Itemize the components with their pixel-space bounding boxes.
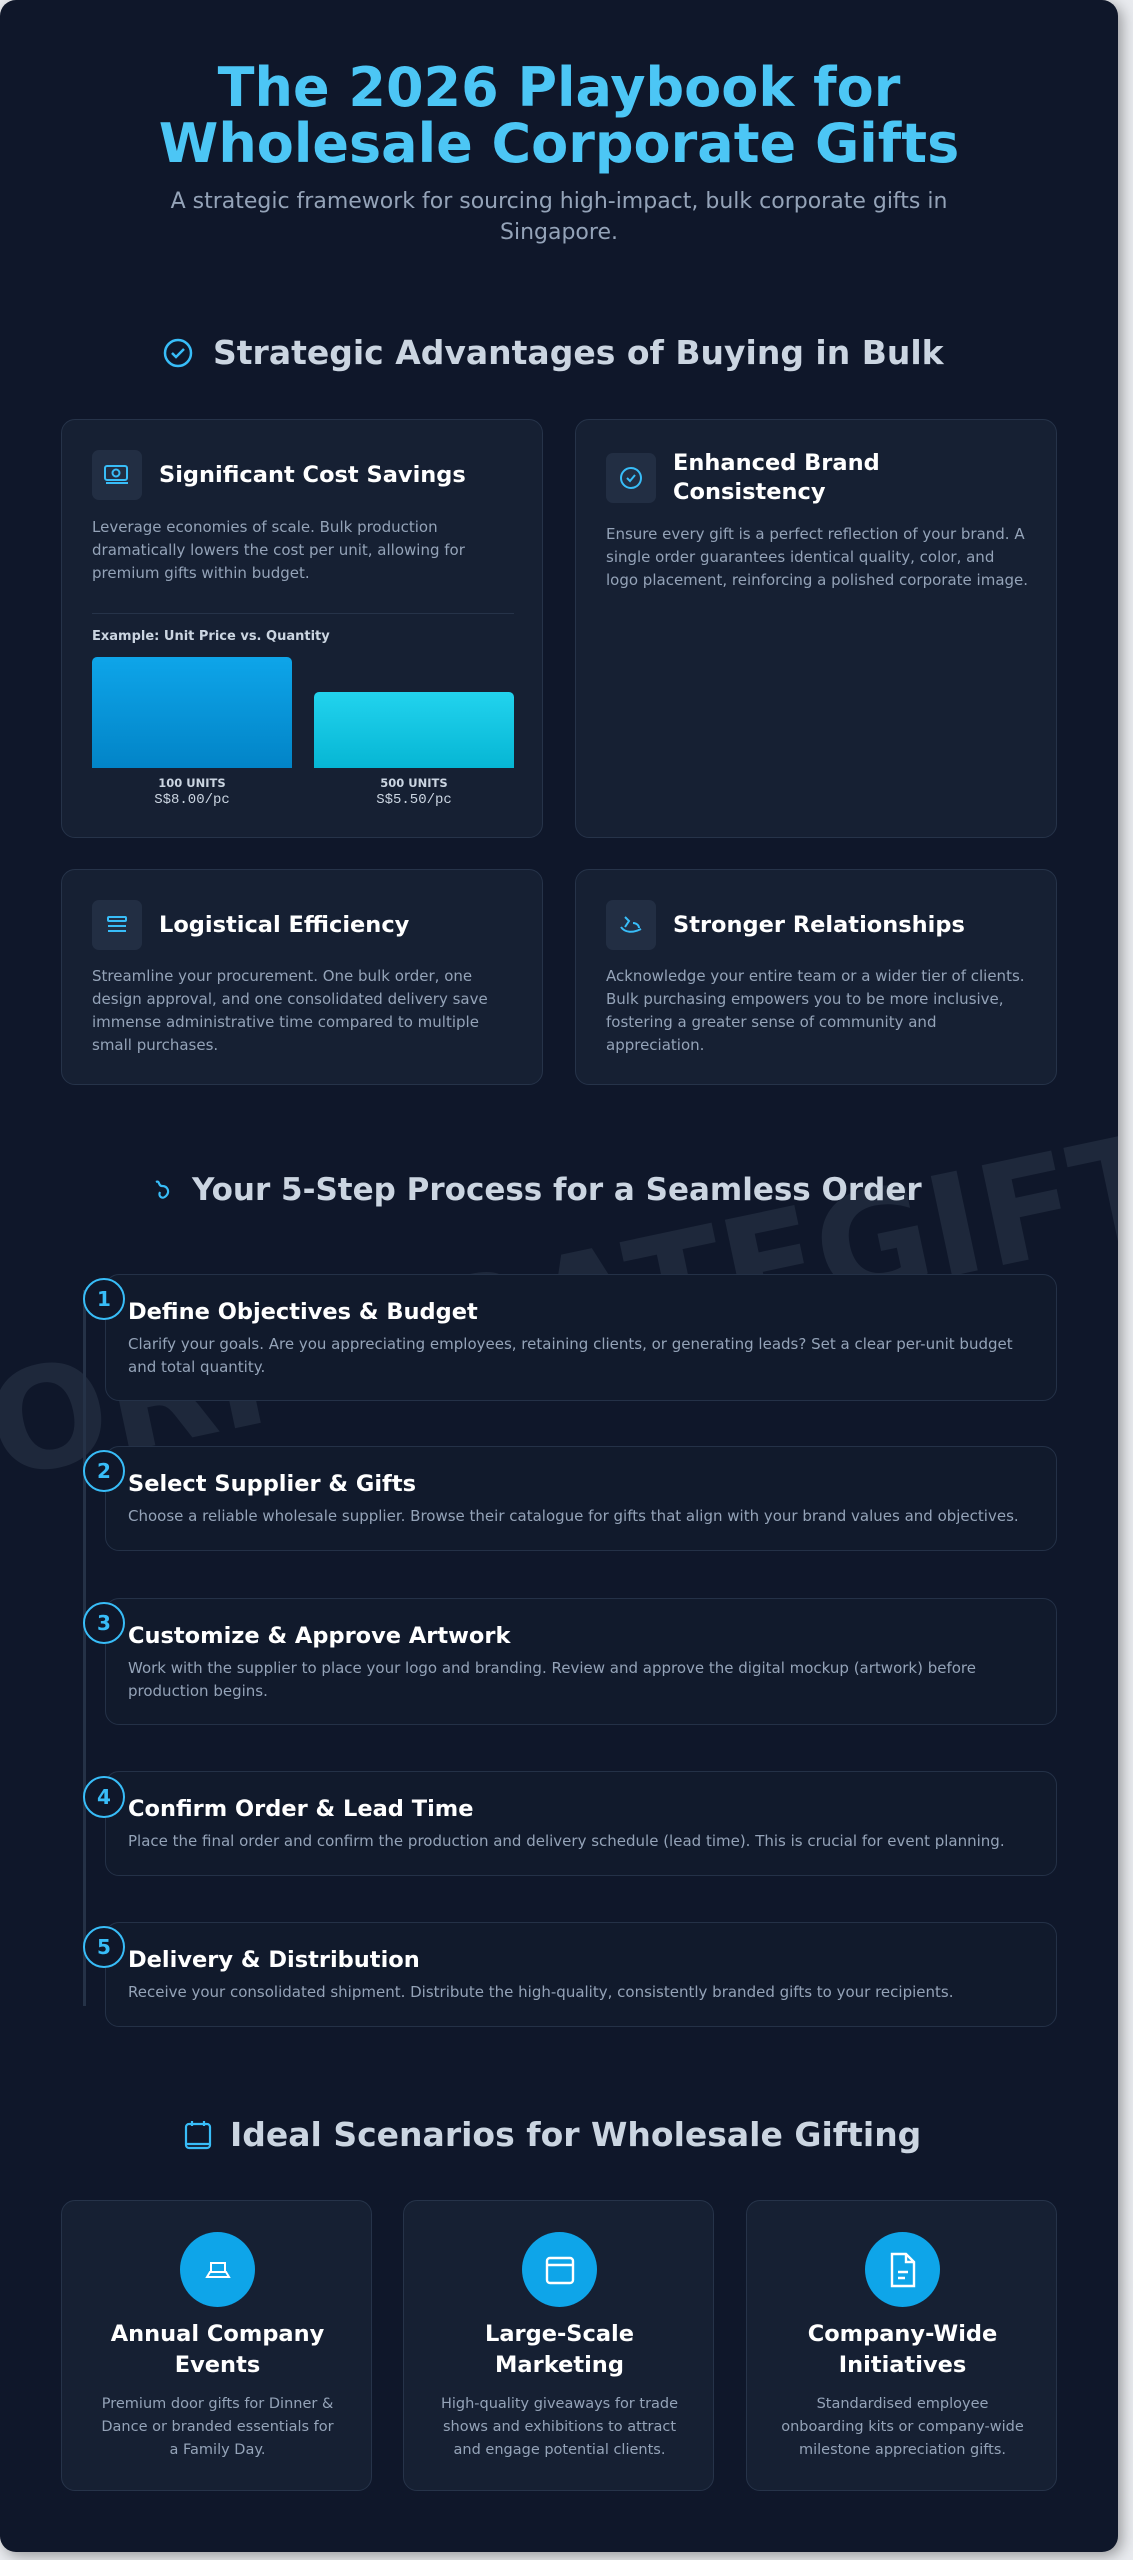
step number 4 <box>83 1776 125 1818</box>
bar chart <box>92 629 514 808</box>
card text: Ensure every gift is a perfect reflection of your brand. A <box>606 525 1025 543</box>
panel: annual events: Premium door gifts for Dinner & Dance or branded essentials for a Family Day. <box>101 2396 334 2458</box>
step number 3: 3 <box>97 1611 111 1635</box>
card text: appreciation. <box>606 1036 704 1054</box>
panel: annual events <box>61 2200 372 2491</box>
panel: logistical efficiency <box>61 869 543 1085</box>
step number 5: 5 <box>97 1935 111 1959</box>
subtitle: A strategic framework for sourcing high-impact, bulk corporate gifts in Singapore. <box>171 189 947 245</box>
card text <box>606 967 1025 1054</box>
step 5: Delivery & Distribution <box>128 1947 420 1973</box>
card text <box>606 525 1028 589</box>
card text: Streamline your procurement. One bulk order, one design approval, and one consolidated delivery save immense administrative time compared to multiple small purchases. <box>92 967 488 1054</box>
bar chart: 500 UNITS <box>380 776 448 790</box>
card title: Significant Cost Savings <box>159 462 466 488</box>
step 3: Work with the supplier to place your logo and branding. Review and approve the digital mockup (artwork) before production begins. <box>128 1659 976 1700</box>
card text: Acknowledge your entire team or a wider tier of clients. <box>606 967 1025 985</box>
bar chart: S$8.00/pc <box>154 792 230 808</box>
bar chart: S$5.50/pc <box>376 792 452 808</box>
icon: handshake <box>606 900 656 950</box>
step 2: Choose a reliable wholesale supplier. Browse their catalogue for gifts that align with your brand values and objectives. <box>128 1507 1019 1525</box>
title: Wholesale Corporate Gifts <box>159 112 959 175</box>
panel: marketing: Large-Scale <box>485 2321 634 2347</box>
step number 3 <box>83 1602 125 1644</box>
card title: Consistency <box>673 479 826 505</box>
icon: document <box>865 2232 940 2307</box>
panel: marketing: High-quality giveaways for trade shows and exhibitions to attract and engage potential clients. <box>441 2396 678 2458</box>
bar chart: Example: Unit Price vs. Quantity <box>92 629 330 644</box>
step number 2 <box>83 1450 125 1492</box>
title: The 2026 Playbook for <box>218 56 900 119</box>
heading: 5-step process: Your 5-Step Process for a Seamless Order <box>192 1172 922 1208</box>
step number 5 <box>83 1926 125 1968</box>
panel: company-wide: Initiatives <box>839 2352 966 2378</box>
step 1 <box>105 1274 1057 1401</box>
icon: laptop <box>180 2232 255 2307</box>
card text: Bulk purchasing empowers you to be more inclusive, <box>606 990 1004 1008</box>
panel: stronger relationships <box>575 869 1057 1085</box>
step 1: Define Objectives & Budget <box>128 1299 478 1325</box>
step 2: Select Supplier & Gifts <box>128 1471 416 1497</box>
icon: badge check <box>606 453 656 503</box>
panel: marketing: Marketing <box>495 2352 624 2378</box>
step number 1: 1 <box>97 1287 111 1311</box>
card text: single order guarantees identical quality, color, and <box>606 548 994 566</box>
panel: annual events: Annual Company <box>111 2321 324 2347</box>
panel: company-wide <box>746 2200 1057 2491</box>
step 4 <box>105 1771 1057 1876</box>
card text: logo placement, reinforcing a polished corporate image. <box>606 571 1028 589</box>
card title: Stronger Relationships <box>673 912 965 938</box>
step 3: Customize & Approve Artwork <box>128 1623 510 1649</box>
bar chart: 100 UNITS <box>158 776 226 790</box>
step 5 <box>105 1922 1057 2027</box>
panel: company-wide: Company-Wide <box>808 2321 997 2347</box>
icon: money <box>92 450 142 500</box>
card text: fostering a greater sense of community and <box>606 1013 936 1031</box>
step 4: Confirm Order & Lead Time <box>128 1796 474 1822</box>
heading: ideal scenarios: Ideal Scenarios for Wholesale Gifting <box>230 2115 921 2154</box>
title <box>159 56 959 175</box>
step 4: Place the final order and confirm the production and delivery schedule (lead time). This is crucial for event planning. <box>128 1832 1005 1850</box>
panel: brand consistency <box>575 419 1057 838</box>
step 1: Clarify your goals. Are you appreciating employees, retaining clients, or generating leads? Set a clear per-unit budget and total quantity. <box>128 1335 1013 1376</box>
panel: annual events: Events <box>175 2352 260 2378</box>
timeline line <box>83 1290 86 2006</box>
panel: company-wide: Standardised employee onboarding kits or company-wide milestone appreciation gifts. <box>781 2396 1024 2458</box>
card title: Logistical Efficiency <box>159 912 409 938</box>
step 5: Receive your consolidated shipment. Distribute the high-quality, consistently branded gifts to your recipients. <box>128 1983 953 2001</box>
step number 1 <box>83 1278 125 1320</box>
card title <box>673 450 880 505</box>
card title: Enhanced Brand <box>673 450 880 476</box>
step 2 <box>105 1446 1057 1551</box>
icon: stack <box>92 900 142 950</box>
panel: marketing <box>403 2200 714 2491</box>
step 3 <box>105 1598 1057 1725</box>
icon: box <box>522 2232 597 2307</box>
heading: strategic advantages: Strategic Advantages of Buying in Bulk <box>213 333 944 372</box>
step number 4: 4 <box>97 1785 111 1809</box>
step number 2: 2 <box>97 1459 111 1483</box>
card text: Leverage economies of scale. Bulk production dramatically lowers the cost per unit, allowing for premium gifts within budget. <box>92 518 465 582</box>
panel: cost savings <box>61 419 543 838</box>
